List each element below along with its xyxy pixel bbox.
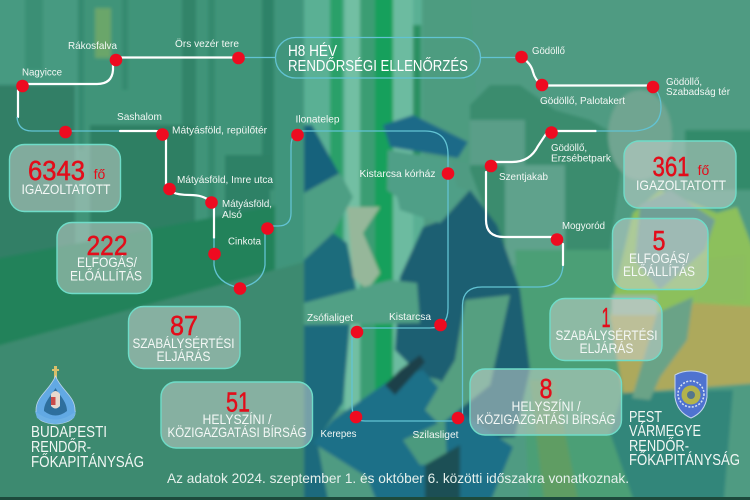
- stat box: 1 szabálysértési eljárás: [550, 298, 662, 360]
- stat box: 361 fő igazoltatott: fő: [698, 162, 710, 178]
- station labels: Mátyásföld, Imre utca: [177, 174, 273, 186]
- lower platform: [0, 262, 304, 500]
- station labels: Kerepes: [320, 428, 356, 440]
- station labels: Gödöllő, Palotakert: [540, 95, 625, 107]
- title: RENDŐRSÉGI ELLENŐRZÉS: [288, 58, 468, 75]
- title: H8 HÉV: [288, 43, 338, 60]
- bottom strip: [0, 497, 750, 500]
- stat box: 8 helyszíni bírság: HELYSZÍNI /: [512, 398, 581, 414]
- stat box: 6343 fő igazoltatott: [10, 144, 120, 212]
- station labels: Örs vezér tere: [175, 38, 239, 50]
- title: [276, 38, 480, 78]
- stat box: 222 elfogás: 222: [86, 230, 128, 261]
- stat box: 5 elfogás: 5: [652, 225, 666, 256]
- stat box: 87 szabálysértési eljárás: 87: [170, 310, 198, 341]
- Pest county police name: PEST: [629, 409, 662, 426]
- stat box: 222 elfogás: ELFOGÁS/: [77, 254, 137, 270]
- station labels: Mátyásföld, repülőtér: [172, 124, 267, 136]
- station labels: Kistarcsa: [389, 311, 431, 323]
- station labels: Nagyicce: [22, 66, 62, 78]
- stat box: 5 elfogás: ELFOGÁS/: [629, 250, 689, 266]
- station markers: [16, 51, 659, 424]
- stat box: 51 helyszíni bírság: KÖZIGAZGATÁSI BÍRSÁG: [168, 423, 306, 440]
- stat box: 1 szabálysértési eljárás: ELJÁRÁS: [580, 340, 634, 356]
- station labels: Zsófialiget: [307, 312, 353, 324]
- stat box: 8 helyszíni bírság: [470, 369, 622, 435]
- stat box: 361 fő igazoltatott: IGAZOLTATOTT: [636, 177, 726, 193]
- centre officer: [395, 190, 530, 440]
- right man: [610, 190, 750, 320]
- icon: Budapest police crest: [35, 366, 76, 424]
- stat box: 6343 fő igazoltatott: fő: [94, 166, 106, 182]
- station labels: Szilasliget: [412, 429, 459, 441]
- station labels: Erzsébetpark: [551, 152, 612, 164]
- stat box: 87 szabálysértési eljárás: ELJÁRÁS: [156, 348, 210, 364]
- Budapest police name: RENDŐR-: [31, 439, 91, 456]
- stat box: 361 fő igazoltatott: [624, 141, 736, 208]
- station labels: Ilonatelep: [296, 114, 340, 126]
- stat box: 1 szabálysértési eljárás: 1: [602, 302, 610, 333]
- stat box: 6343 fő igazoltatott: IGAZOLTATOTT: [22, 181, 111, 197]
- station labels: Sashalom: [117, 111, 162, 123]
- station labels: Mátyásföld,: [222, 198, 272, 210]
- left train body: [0, 0, 304, 260]
- stat box: 222 elfogás: [57, 222, 152, 294]
- stat box: 1 szabálysértési eljárás: SZABÁLYSÉRTÉSI: [556, 327, 658, 343]
- stat box: 87 szabálysértési eljárás: SZABÁLYSÉRTÉSI: [132, 335, 234, 351]
- station labels: [22, 38, 730, 441]
- station labels: Alsó: [222, 209, 242, 221]
- stat box: 8 helyszíni bírság: 8: [540, 373, 552, 404]
- station labels: Szentjakab: [499, 171, 548, 183]
- footnote: Az adatok 2024. szeptember 1. és október 6. közötti időszakra vonatkoznak.: [167, 470, 629, 486]
- station labels: Gödöllő,: [551, 142, 587, 154]
- stat box: 361 fő igazoltatott: 361: [652, 151, 690, 182]
- station labels: Rákosfalva: [68, 40, 117, 52]
- stat box: 51 helyszíni bírság: [161, 382, 312, 448]
- route line: [17, 57, 661, 421]
- stat box: 222 elfogás: ELŐÁLLÍTÁS: [70, 268, 142, 284]
- station labels: Gödöllő: [532, 45, 565, 57]
- stat box: 87 szabálysértési eljárás: [128, 306, 240, 368]
- Budapest police name: FŐKAPITÁNYSÁG: [31, 454, 144, 471]
- trees and station: [470, 85, 625, 250]
- left officer: [304, 125, 340, 197]
- stat box: 5 elfogás: [612, 218, 708, 290]
- station labels: Szabadság tér: [666, 86, 730, 98]
- Budapest police name: BUDAPESTI: [31, 424, 107, 441]
- stat box: 8 helyszíni bírság: KÖZIGAZGATÁSI BÍRSÁG: [476, 410, 616, 427]
- centre train: [304, 0, 424, 410]
- Pest county police name: VÁRMEGYE: [629, 423, 701, 440]
- Budapest police name: [31, 424, 144, 471]
- station labels: Gödöllő,: [666, 76, 702, 88]
- station labels: Kistarcsa kórház: [360, 168, 436, 180]
- stat box: 51 helyszíni bírság: 51: [226, 386, 250, 418]
- stat box: 6343 fő igazoltatott: 6343: [28, 155, 85, 186]
- station labels: Mogyoród: [562, 220, 605, 232]
- icon: Pest county police badge: [675, 371, 707, 418]
- Pest county police name: RENDŐR-: [629, 438, 689, 455]
- stat box: 51 helyszíni bírság: HELYSZÍNI /: [202, 411, 272, 427]
- station labels: Cinkota: [228, 236, 261, 248]
- stat box: 5 elfogás: ELŐÁLLÍTÁS: [623, 263, 695, 279]
- Pest county police name: [629, 409, 740, 469]
